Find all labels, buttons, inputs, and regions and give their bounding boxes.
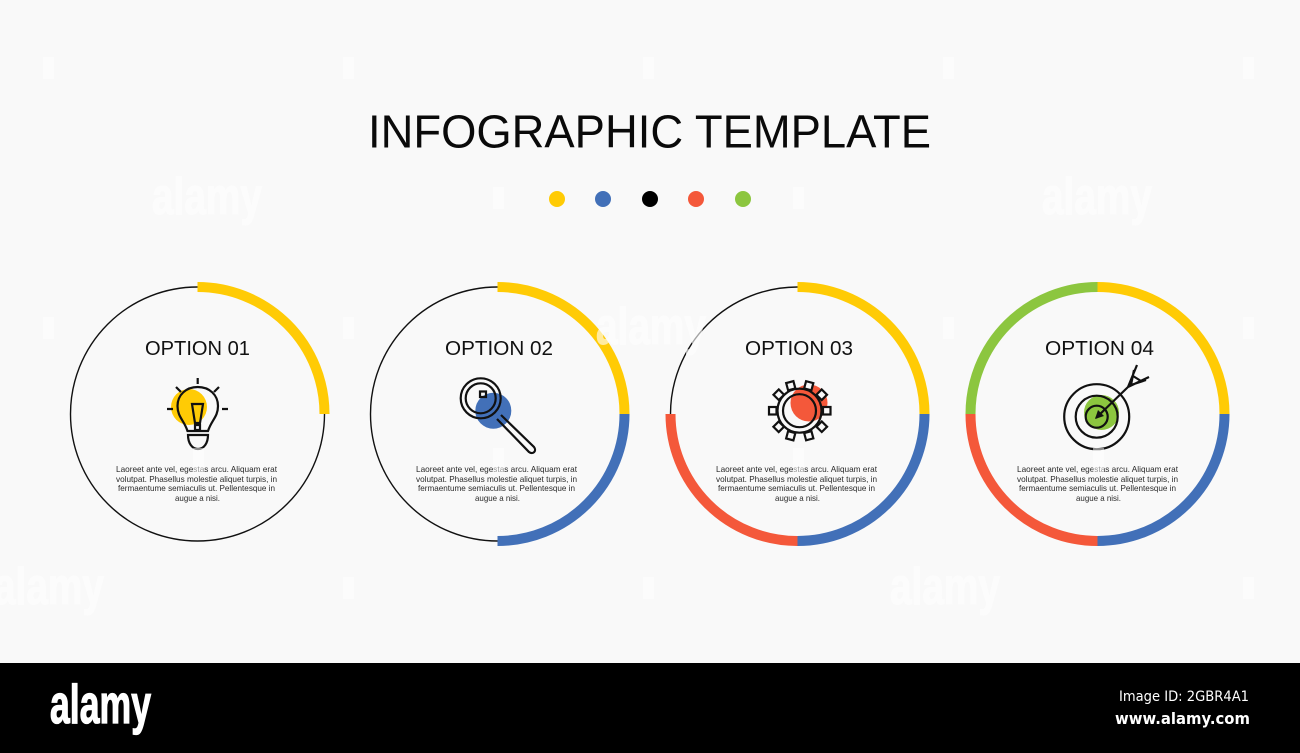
image id: Image ID: 2GBR4A1 [1119,689,1249,705]
icon: magnifying glass [461,378,535,453]
footer logo: alamy [50,673,151,735]
text block: fermaentume semiaculis ut. Pellentesque in [118,484,275,493]
text block: augue a nisi. [775,494,820,503]
progress arc: blue [798,414,924,541]
text block: Laoreet ante vel, egestas arcu. Aliquam erat [116,465,278,474]
heading: option 01: OPTION 01 [145,338,250,360]
icon: gear [769,381,830,440]
watermark pattern: alamy [1042,168,1152,226]
watermark pattern [0,57,1254,616]
icon: target and arrow [1064,365,1149,449]
watermark pattern: alamy [890,558,1000,616]
heading: option 02: OPTION 02 [445,338,553,360]
text block: Laoreet ante vel, egestas arcu. Aliquam erat [716,465,878,474]
progress arc: red [970,414,1098,541]
progress arc: blue [498,414,624,541]
text block [1017,465,1179,503]
panel: option 02 [370,287,624,541]
watermark pattern: alamy [596,298,706,356]
icon: light bulb [167,378,228,449]
text block: volutpat. Phasellus molestie aliquet turpis, in [116,475,277,484]
heading: option 04: OPTION 04 [1045,338,1154,360]
website: www.alamy.com [1115,709,1250,728]
progress arc: yellow [1098,287,1224,414]
panel: option 04 [970,287,1224,541]
text block: fermaentume semiaculis ut. Pellentesque in [718,484,875,493]
text block [116,465,278,503]
text block: Laoreet ante vel, egestas arcu. Aliquam erat [416,465,578,474]
progress arc: blue [1098,414,1224,541]
panel: option 03 [670,287,924,541]
progress arc: yellow [198,287,324,414]
text block: Laoreet ante vel, egestas arcu. Aliquam erat [1017,465,1179,474]
progress arc: yellow [798,287,924,414]
text block: augue a nisi. [175,494,220,503]
heading: option 03: OPTION 03 [745,338,853,360]
watermark pattern: alamy [152,168,262,226]
title: INFOGRAPHIC TEMPLATE [368,106,931,158]
panel: option 01 [70,287,324,541]
text block: augue a nisi. [475,494,520,503]
progress arc: red [670,414,798,541]
text block: fermaentume semiaculis ut. Pellentesque in [1019,484,1176,493]
text block: volutpat. Phasellus molestie aliquet turpis, in [1017,475,1178,484]
footer bar [0,663,1300,753]
text block [416,465,578,503]
progress arc: yellow [498,287,624,414]
colour dots [549,191,751,207]
text block: volutpat. Phasellus molestie aliquet turpis, in [716,475,877,484]
text block: augue a nisi. [1076,494,1121,503]
progress arc: green [970,287,1098,414]
text block [716,465,878,503]
text block: fermaentume semiaculis ut. Pellentesque in [418,484,575,493]
text block: volutpat. Phasellus molestie aliquet turpis, in [416,475,577,484]
